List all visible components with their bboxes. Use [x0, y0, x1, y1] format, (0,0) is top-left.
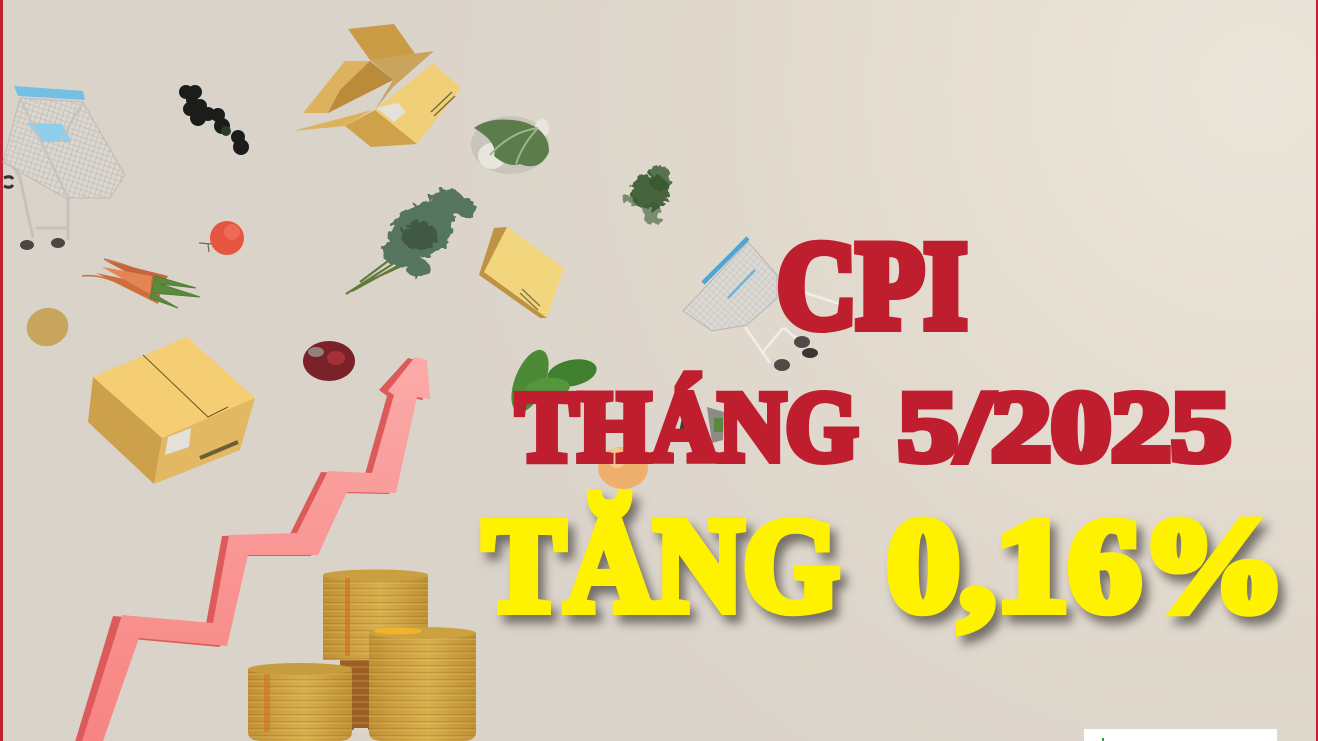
icon: carrots: [82, 259, 200, 308]
right red border: [1316, 0, 1318, 741]
icon: gold coin stacks: [248, 570, 476, 741]
front right coin stack: [369, 627, 476, 741]
icon: onion: [598, 447, 648, 489]
headline: TĂNG 0,16%: [483, 491, 1286, 639]
icon: flat cardboard box: [479, 227, 564, 318]
heading: THÁNG 5/2025: THÁNG: [516, 371, 858, 482]
icon: large cardboard box: [88, 337, 255, 484]
icon: black grapes: [179, 85, 249, 155]
icon: shopping cart right: [683, 238, 852, 371]
icon: cauliflower: [471, 116, 549, 174]
heading: THÁNG 5/2025: 5/2025: [898, 371, 1231, 482]
icon: potato: [22, 303, 73, 351]
icon: apple: [303, 341, 355, 381]
front left coin stack: [248, 663, 352, 741]
icon: dill: [622, 165, 671, 225]
arrow: rising red arrow: [75, 357, 430, 741]
headline: TĂNG 0,16%: 0,16%: [887, 491, 1286, 639]
headline: TĂNG 0,16%: TĂNG: [483, 491, 839, 639]
back coin stack: [323, 570, 428, 660]
left red border: [0, 0, 3, 741]
white logo box: [1084, 729, 1277, 741]
icon: shopping cart left: [3, 86, 125, 250]
icon: vegetable behind letter A: [679, 407, 724, 443]
heading: THÁNG 5/2025: [516, 371, 1231, 482]
icon: green herb bunch: [346, 189, 475, 294]
title: CPI: CPI: [777, 217, 967, 354]
icon: cucumbers: [504, 345, 599, 417]
icon: open cardboard box: [293, 24, 461, 147]
middle shadowed coins: [340, 660, 380, 734]
icon: tomato: [199, 221, 244, 255]
